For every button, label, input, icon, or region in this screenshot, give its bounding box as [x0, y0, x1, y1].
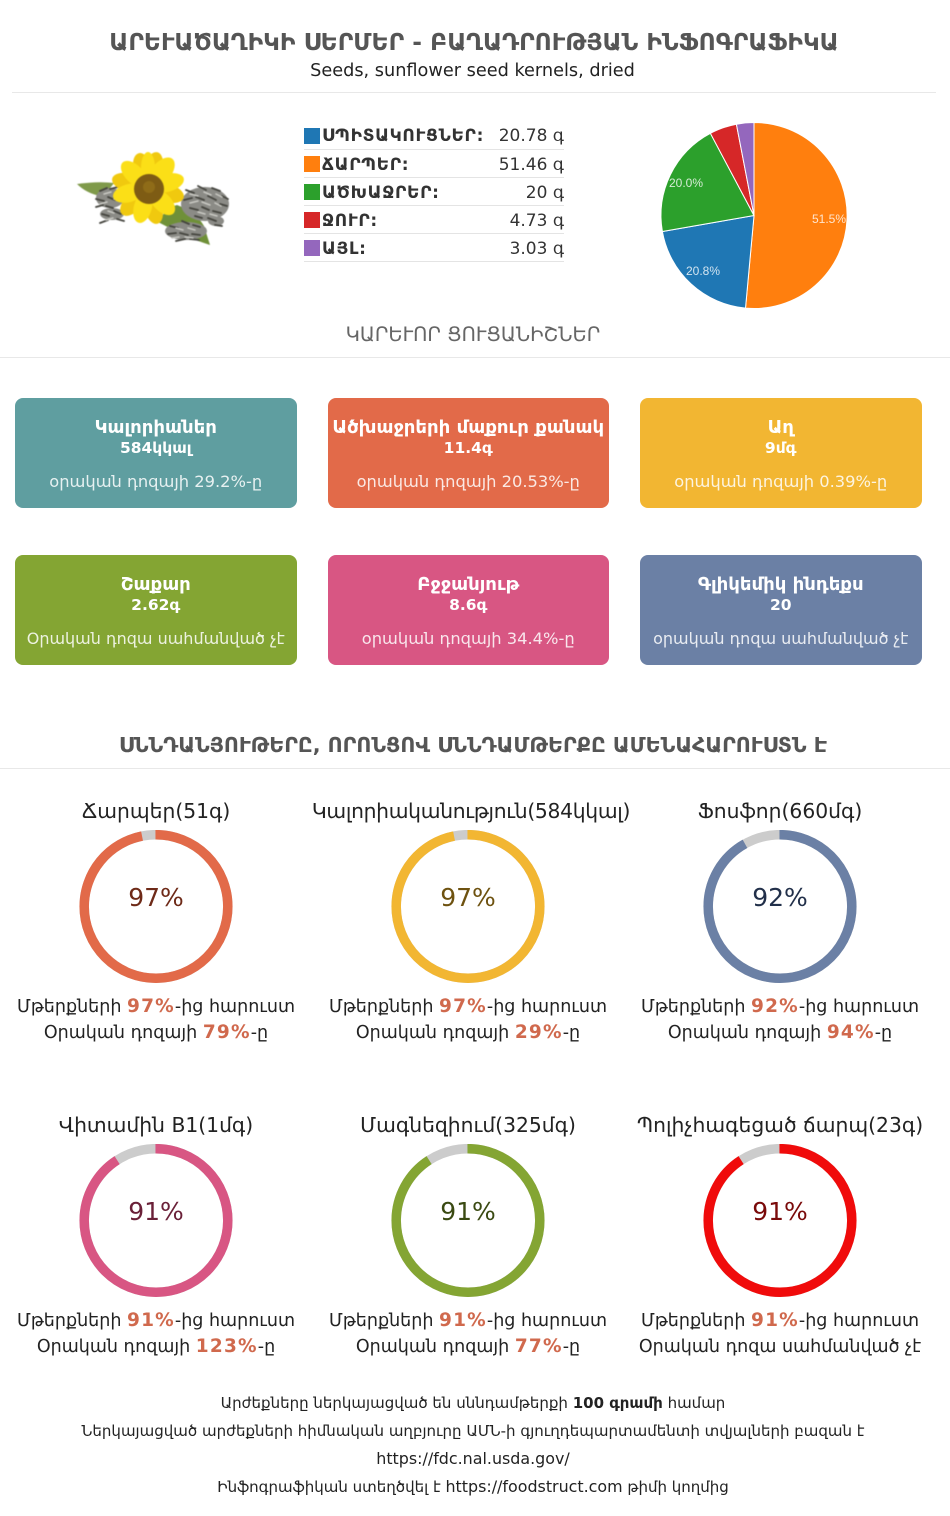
ring panel: calories: Կալորիականություն(584կկալ)	[312, 799, 630, 823]
card: fiber	[328, 555, 609, 665]
ring chart: 97%	[391, 830, 545, 983]
card: fiber: 8.6գ	[449, 596, 487, 614]
card: net carbohydrates: 11.4գ	[444, 439, 493, 457]
ring panel: vitamin B1: Մթերքների 91%-ից հարուստ	[17, 1310, 295, 1330]
ring chart: 91%	[703, 1144, 857, 1297]
ring chart: 91%: 91%	[440, 1197, 496, 1226]
legend row: other	[304, 237, 564, 262]
card: salt: Աղ	[768, 417, 794, 438]
footer notes: Արժեքները ներկայացված են սննդամթերքի 100 գրամի համար	[221, 1394, 725, 1412]
card: net carbohydrates: օրական դոզայի 20.53%-ը	[357, 472, 580, 491]
ring chart: 91%: 91%	[128, 1197, 184, 1226]
ring chart: 92%: 92%	[752, 883, 808, 912]
legend row: proteins	[304, 124, 564, 150]
card: glycemic index: 20	[770, 596, 792, 614]
title: ԱՐԵՒԱԾԱՂԻԿԻ ՍԵՐՄԵՐ - ԲԱՂԱԴՐՈՒԹՅԱՆ ԻՆՖՈԳՐԱՖԻԿԱ	[109, 28, 839, 56]
heading: richest nutrients: ՍՆՆԴԱՆՅՈՒԹԵՐԸ, ՈՐՈՆՑՈՎ ՍՆՆԴԱՄԹԵՐՔԸ ԱՄԵՆԱՀԱՐՈՒՍՏՆ Է	[119, 733, 827, 757]
card: net carbohydrates: Ածխաջրերի մաքուր քանակ	[332, 417, 604, 438]
card: glycemic index: Գլիկեմիկ ինդեքս	[698, 574, 864, 595]
legend row: proteins: 20.78 գ	[499, 126, 564, 146]
card: sugar: 2.62գ	[131, 596, 180, 614]
ring panel: fat	[17, 799, 295, 1042]
ring panel: phosphorus	[641, 799, 919, 1042]
icon: sunflower with seeds	[76, 151, 230, 246]
ring panel: magnesium: Օրական դոզայի 77%-ը	[356, 1336, 580, 1356]
ring panel: vitamin B1: Օրական դոզայի 123%-ը	[37, 1336, 275, 1356]
legend row: water: ՋՈՒՐ:	[322, 211, 378, 231]
pie chart	[661, 123, 847, 308]
card: net carbohydrates	[328, 398, 609, 508]
ring panel: fat: Օրական դոզայի 79%-ը	[44, 1022, 268, 1042]
ring chart: 97%: 97%	[440, 883, 496, 912]
card: salt	[640, 398, 922, 508]
legend row: other: 3.03 գ	[510, 239, 564, 259]
legend row: water: 4.73 գ	[510, 211, 564, 231]
ring panel: phosphorus: Մթերքների 92%-ից հարուստ	[641, 996, 919, 1016]
heading: key indicators: ԿԱՐԵՒՈՐ ՑՈՒՑԱՆԻՇՆԵՐ	[346, 323, 600, 346]
ring chart: 91%	[79, 1144, 233, 1297]
ring panel: magnesium	[329, 1113, 607, 1356]
legend: macronutrients	[304, 126, 564, 262]
ring panel: polyunsaturated fat: Մթերքների 91%-ից հարուստ	[641, 1310, 919, 1330]
ring chart: 91%: 91%	[752, 1197, 808, 1226]
footer notes	[81, 1394, 865, 1496]
card: fiber: օրական դոզայի 34.4%-ը	[362, 629, 575, 648]
pie chart: 20.0%	[669, 176, 703, 190]
card: calories: օրական դոզայի 29.2%-ը	[49, 472, 262, 491]
card: sugar	[15, 555, 296, 665]
card: glycemic index	[640, 555, 922, 665]
card: fiber: Բջջանյութ	[417, 574, 519, 595]
card: sugar: Շաքար	[121, 574, 191, 595]
ring panel: polyunsaturated fat: Օրական դոզա սահմանված չէ	[639, 1336, 921, 1356]
pie chart: 20.8%	[686, 264, 720, 278]
ring panel: phosphorus: Օրական դոզայի 94%-ը	[668, 1022, 892, 1042]
card: glycemic index: օրական դոզա սահմանված չէ	[653, 629, 908, 648]
legend row: fats: 51.46 գ	[499, 155, 564, 175]
ring chart: 97%	[79, 830, 233, 983]
ring panel: vitamin B1: Վիտամին B1(1մգ)	[59, 1113, 253, 1137]
ring panel: vitamin B1	[17, 1113, 295, 1356]
legend row: carbohydrates	[304, 181, 564, 206]
legend row: fats: ՃԱՐՊԵՐ:	[322, 155, 409, 175]
legend row: carbohydrates: 20 գ	[526, 183, 564, 203]
ring panel: magnesium: Մթերքների 91%-ից հարուստ	[329, 1310, 607, 1330]
ring panel: magnesium: Մագնեզիում(325մգ)	[360, 1113, 576, 1137]
ring panel: phosphorus: Ֆոսֆոր(660մգ)	[698, 799, 862, 823]
legend row: fats	[304, 153, 564, 178]
card: sugar: Օրական դոզա սահմանված չէ	[27, 629, 285, 648]
card: calories: 584կկալ	[120, 439, 192, 457]
subtitle: Seeds, sunflower seed kernels, dried	[310, 61, 635, 81]
footer notes: https://fdc.nal.usda.gov/	[376, 1449, 570, 1468]
ring panel: polyunsaturated fat: Պոլիչհագեցած ճարպ(23գ)	[637, 1113, 923, 1137]
legend row: carbohydrates: ԱԾԽԱՋՐԵՐ:	[322, 183, 440, 203]
ring panel: fat: Մթերքների 97%-ից հարուստ	[17, 996, 295, 1016]
card: calories	[15, 398, 296, 508]
card: salt: օրական դոզայի 0.39%-ը	[674, 472, 887, 491]
ring chart: 97%: 97%	[128, 883, 184, 912]
ring chart: 92%	[703, 830, 857, 983]
legend row: proteins: ՍՊԻՏԱԿՈՒՑՆԵՐ:	[322, 126, 484, 146]
ring chart: 91%	[391, 1144, 545, 1297]
ring panel: calories	[312, 799, 630, 1042]
ring panel: calories: Մթերքների 97%-ից հարուստ	[329, 996, 607, 1016]
ring panel: fat: Ճարպեր(51գ)	[82, 799, 230, 823]
ring panel: polyunsaturated fat	[637, 1113, 923, 1356]
footer notes: Ինֆոգրաֆիկան ստեղծվել է https://foodstruct.com թիմի կողմից	[217, 1477, 729, 1496]
ring panel: calories: Օրական դոզայի 29%-ը	[356, 1022, 580, 1042]
pie chart: 51.5%	[812, 212, 846, 226]
legend row: other: ԱՅԼ:	[322, 239, 367, 259]
card: salt: 9մգ	[765, 439, 797, 457]
footer notes: Ներկայացված արժեքների հիմնական աղբյուրը ԱՄՆ-ի գյուղդեպարտամենտի տվյալների բազան է	[81, 1422, 865, 1440]
card: calories: Կալորիաներ	[95, 417, 217, 438]
legend row: water	[304, 209, 564, 234]
